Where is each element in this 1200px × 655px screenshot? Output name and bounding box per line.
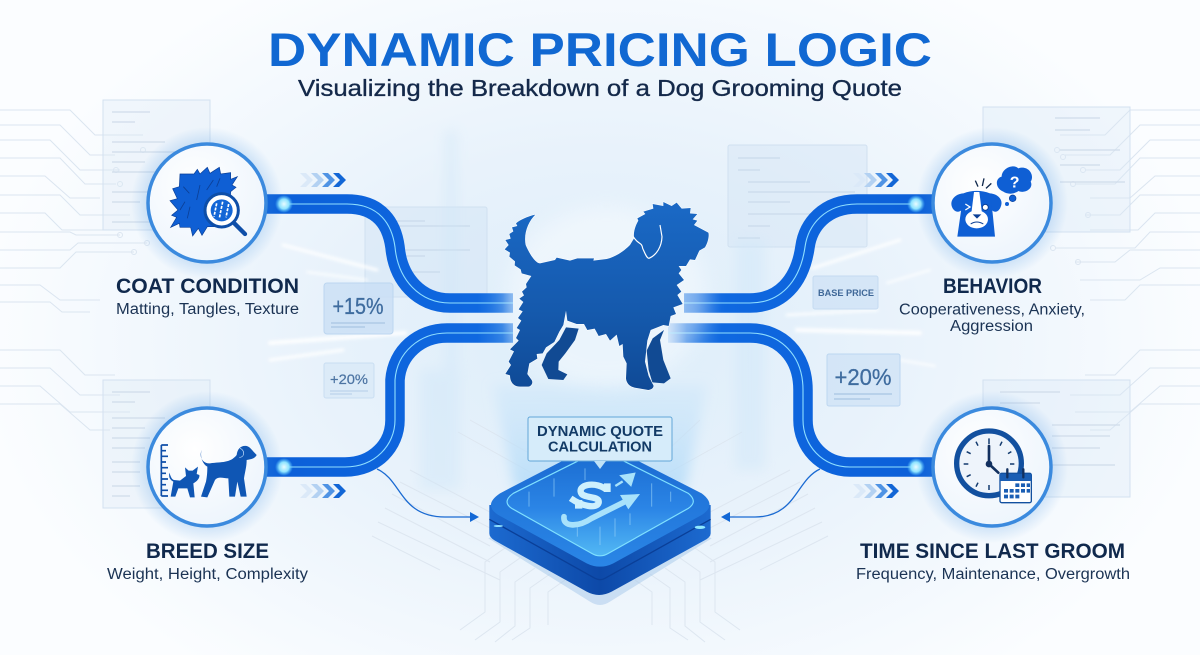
chevrons: breed size (300, 484, 346, 498)
heading: breed size: BREED SIZE (146, 540, 269, 563)
title: DYNAMIC PRICING LOGIC (268, 23, 932, 76)
code panel: centre right (728, 145, 867, 247)
breed circle (131, 391, 283, 543)
dog silhouette (505, 202, 709, 390)
far front leg (647, 330, 671, 383)
panel: behavior (899, 127, 1085, 335)
platform screen (507, 452, 693, 556)
far rear leg (542, 327, 579, 380)
coat circle (131, 127, 283, 279)
pipe: coat condition (262, 204, 513, 303)
circuit lines right (1050, 110, 1200, 430)
pipe nodes (275, 195, 925, 476)
text: behavior detail: Aggression (950, 318, 1033, 335)
panel: breed size (107, 391, 308, 583)
behavior circle (916, 127, 1068, 279)
icon: anxious dog with thought bubble (951, 166, 1032, 237)
panel: coat condition (116, 127, 299, 318)
text: behavior detail (899, 302, 1085, 335)
arrow: breed size to platform (377, 469, 479, 522)
pipe: time since last groom (668, 333, 938, 467)
subtitle: Visualizing the Breakdown of a Dog Grooming Quote (298, 75, 902, 101)
dollar S (571, 485, 606, 506)
icon: ruler with small and large dog (161, 445, 257, 497)
text: coat condition detail: Matting, Tangles, Texture (116, 301, 299, 318)
time circle (916, 391, 1068, 543)
platform seam (489, 519, 711, 580)
dollar and arrows icon (564, 474, 640, 525)
badge: +20% left: +20% (330, 371, 368, 387)
circuit lines left (0, 110, 150, 430)
platform lights (494, 525, 503, 527)
badge: base price: BASE PRICE (818, 288, 874, 299)
calculation platform (488, 445, 712, 605)
screen rain lines (529, 468, 671, 545)
chevrons: time since last groom (853, 484, 899, 498)
icon: clock and calendar (957, 431, 1031, 503)
arrow: time since last groom to platform (721, 469, 820, 522)
platform top (491, 445, 709, 567)
icon: anxious dog with thought bubble: ? (1010, 174, 1020, 191)
pipe: behavior (684, 204, 938, 303)
callout: dynamic quote calculation (528, 417, 672, 469)
callout: dynamic quote calculation: DYNAMIC QUOTE (537, 424, 663, 440)
heading: time since last groom: TIME SINCE LAST GROOM (860, 540, 1125, 563)
badge: +15% (324, 283, 393, 334)
heading: coat condition: COAT CONDITION (116, 275, 299, 298)
light beam (493, 385, 707, 490)
badge: +20% right (827, 354, 900, 406)
chevrons: coat condition (300, 173, 346, 187)
code panel: top right (983, 107, 1130, 232)
arrow curve (564, 500, 628, 525)
dog ear outline (633, 225, 662, 258)
heading: behavior: BEHAVIOR (943, 275, 1042, 298)
pricing pipes (262, 204, 938, 467)
circuit lines around platform (372, 420, 828, 642)
dog body (505, 202, 709, 390)
platform shadow (488, 482, 712, 605)
code panels (103, 100, 1130, 508)
panel: time since last groom (856, 391, 1130, 583)
badge: +20% left (324, 363, 374, 398)
arrow head (620, 494, 640, 509)
upper arrow (615, 474, 634, 486)
icon: matted coat with magnifier (170, 167, 245, 236)
code panel: top left (103, 100, 210, 230)
light streaks (270, 240, 935, 366)
code panel: centre left (365, 207, 487, 297)
code panel: bottom left (103, 380, 210, 508)
chevrons: behavior (853, 173, 899, 187)
code panel: bottom right (983, 380, 1130, 497)
platform base (489, 505, 711, 595)
badge: +20% right: +20% (834, 364, 892, 390)
callout: dynamic quote calculation: CALCULATION (548, 440, 652, 456)
vertical light columns (420, 130, 765, 490)
text: time since last groom detail: Frequency, Maintenance, Overgrowth (856, 566, 1130, 583)
text: behavior detail: Cooperativeness, Anxiety, (899, 302, 1085, 318)
dollar serifs (575, 483, 611, 509)
badge: +15%: +15% (332, 293, 384, 319)
text: breed size detail: Weight, Height, Complexity (107, 566, 308, 583)
pipe: breed size (262, 333, 513, 467)
badge: base price (813, 276, 878, 309)
dog halo (507, 207, 707, 387)
